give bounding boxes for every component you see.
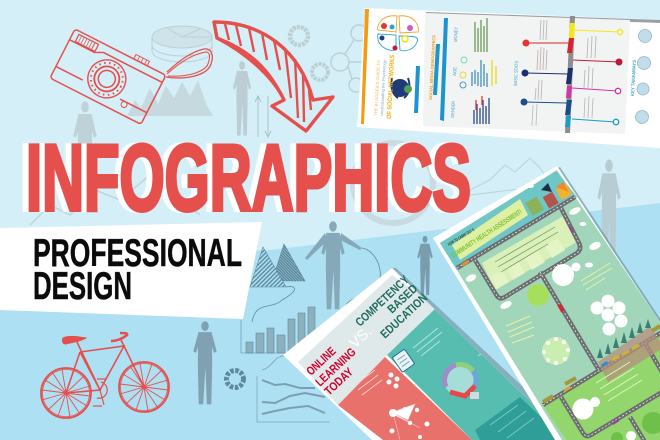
heading: competency based education: COMPETENCY	[352, 273, 412, 329]
central timeline bar	[565, 16, 575, 133]
teal panel text lines	[412, 328, 482, 356]
pie chart sketch	[152, 26, 212, 62]
camera wrist strap	[166, 49, 212, 78]
chainring and crank	[93, 379, 107, 406]
figure icon with globe	[391, 78, 412, 98]
man behind camera	[73, 101, 97, 197]
mint background	[440, 170, 660, 440]
right wheel	[119, 362, 169, 412]
background: darker blue lower area	[0, 203, 660, 440]
demographics bar clusters	[472, 18, 496, 124]
network diagram	[355, 370, 430, 440]
age circles	[460, 57, 467, 88]
background sketch: pale upper illustrations	[30, 25, 621, 265]
green info circle	[527, 284, 549, 306]
hatched mountains	[250, 244, 305, 287]
dark teal panel	[475, 397, 555, 440]
label: how to carry out a: HOW TO CARRY OUT A	[447, 227, 476, 247]
sheet heading text: OF SOCIAL NETWORKS	[386, 54, 396, 119]
key takeaways icons	[636, 30, 652, 124]
section heading: gender: GENDER	[450, 100, 456, 118]
header band	[298, 275, 437, 405]
top edge shading	[426, 12, 660, 23]
faint lines behind the title	[30, 175, 200, 225]
heading: online learning today	[303, 344, 359, 398]
left wheel	[41, 368, 91, 418]
heading: competency based education: EDUCATION	[377, 291, 430, 341]
sheet title text: THE BLOGGER'S GUIDE TO	[373, 60, 381, 116]
heading: online learning today: LEARNING	[312, 345, 359, 389]
lower circles	[572, 397, 660, 440]
faint ring chart	[353, 143, 433, 223]
heading: competency based education	[352, 273, 430, 341]
infographic sheet: community health assessment	[433, 166, 660, 440]
grey content panel	[423, 13, 630, 134]
arrow: red hatched curved arrow	[214, 22, 333, 131]
jagged area chart sketch	[127, 80, 213, 116]
section heading: basic stats: BASIC STATS	[513, 61, 520, 86]
cars	[461, 226, 619, 425]
white info circle	[552, 264, 574, 286]
section heading: social media demographics: SOCIAL MEDIA DEMOGRAPHICS	[428, 35, 436, 100]
infographic sheet: online learning vs competency based education	[283, 268, 580, 440]
checklist lines	[506, 263, 612, 343]
molecule network	[331, 25, 370, 92]
heading: online learning today: ONLINE	[303, 344, 339, 378]
road dashes	[457, 197, 660, 440]
line chart	[257, 356, 330, 422]
hexagon cluster	[590, 294, 628, 336]
timeline branches and node circles	[521, 30, 622, 125]
background sketch: dark blue lower illustrations	[193, 221, 433, 422]
handlebars	[111, 333, 127, 341]
man with pointer	[233, 61, 251, 136]
orange spine	[361, 9, 369, 124]
icon: red bicycle	[41, 333, 169, 418]
sheet paper	[433, 166, 660, 440]
white banner	[0, 222, 262, 319]
lower checklist lines	[596, 362, 642, 401]
subtitle: professional: PROFESSIONAL	[33, 232, 242, 275]
sheet subtitle text: Understanding the Psychology	[379, 60, 387, 116]
houses	[525, 182, 572, 216]
teal header	[440, 171, 577, 270]
trees on hill	[597, 319, 660, 382]
timeline text columns	[532, 20, 596, 126]
heading: online learning today: TODAY	[321, 365, 356, 398]
white small circle	[572, 262, 580, 272]
teal panel	[387, 309, 542, 440]
businessman walking	[417, 236, 433, 295]
sheet paper	[283, 268, 570, 440]
intro box	[482, 215, 580, 290]
green lower area	[543, 333, 660, 440]
saddle	[62, 336, 86, 344]
roads	[457, 197, 660, 440]
vertical arrows	[255, 96, 271, 137]
curved connector lines	[252, 248, 380, 322]
red panel	[338, 357, 472, 440]
frame	[66, 338, 144, 393]
subtitle: design: DESIGN	[33, 265, 132, 308]
heading: community health assessment: COMMUNITY HEALTH ASSESSMENT!	[450, 209, 524, 260]
small boxes row	[491, 238, 565, 289]
bushes along road	[543, 326, 660, 402]
sheet shadow	[392, 268, 580, 440]
heading: competency based education: BASED	[384, 281, 421, 316]
title box	[452, 199, 528, 260]
text lines in boxes	[495, 227, 558, 272]
vs label: VS.	[346, 323, 375, 352]
dark panel text lines	[490, 405, 534, 438]
man on the right	[597, 160, 621, 265]
businessman with chart	[193, 321, 217, 404]
section heading: age: AGE	[452, 67, 457, 76]
section heading: money: MONEY	[453, 27, 459, 42]
businessman centre	[305, 221, 362, 309]
sheet shadow	[556, 167, 660, 337]
icon: red camera	[50, 25, 212, 124]
tablet icon	[392, 349, 415, 372]
gear icons	[290, 27, 328, 80]
small area chart on right	[470, 158, 552, 195]
infographic sheet: social networks guide	[357, 8, 660, 148]
key takeaways heading: KEY TAKEAWAYS	[630, 60, 637, 96]
gear icon	[226, 370, 244, 388]
blue strips	[414, 18, 448, 121]
ring diagram	[444, 364, 479, 399]
clouds	[465, 184, 602, 310]
sheet paper	[357, 8, 660, 148]
brain icon	[378, 16, 418, 51]
stacked bar chart	[241, 307, 320, 353]
circular icon wheel	[542, 337, 570, 365]
